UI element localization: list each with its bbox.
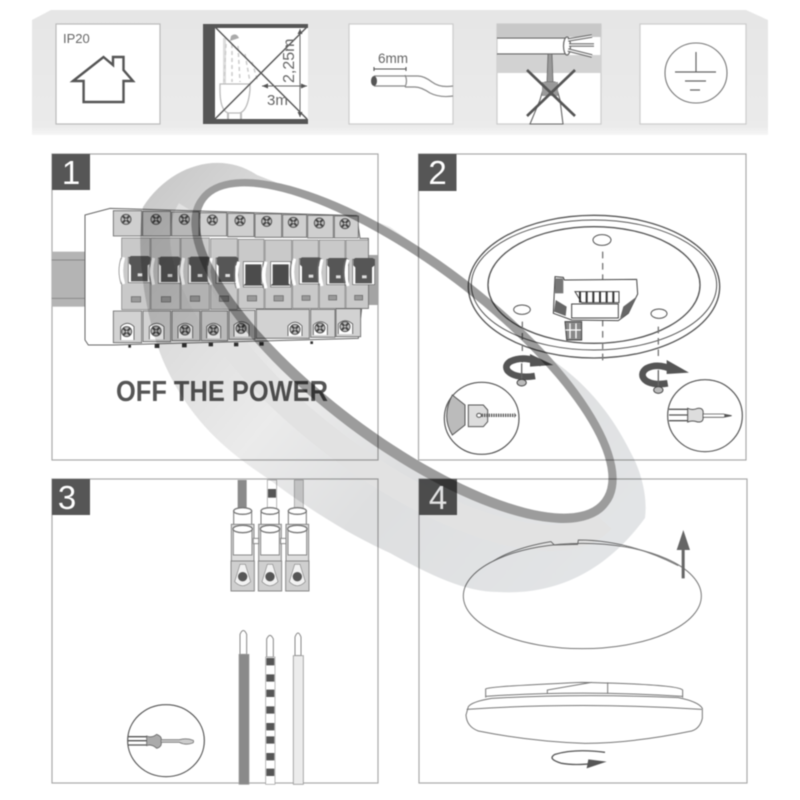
inset: screwdriver xyxy=(128,705,204,777)
panel 2: mount base plate xyxy=(418,154,746,460)
icon: bathroom zone prohibited: 2,25m xyxy=(281,39,298,83)
wire: brown xyxy=(239,630,249,784)
step badge 1: 1 xyxy=(62,154,80,191)
wire: striped earth xyxy=(266,635,275,784)
ghost lamp overlay xyxy=(140,163,646,592)
step badge 3 xyxy=(52,479,90,516)
arrow up xyxy=(677,530,690,578)
step badge 3: 3 xyxy=(58,479,76,516)
icon: bathroom zone prohibited: 3m xyxy=(267,92,288,109)
lamp diagrams xyxy=(463,530,702,768)
caption: off the power: OFF THE POWER xyxy=(116,376,328,408)
step badge 4 xyxy=(419,479,457,516)
icon: earth ground xyxy=(640,24,746,124)
step badge 4: 4 xyxy=(429,479,447,516)
base plate diagram xyxy=(444,215,742,454)
circuit breaker xyxy=(52,208,378,348)
step badge 1 xyxy=(52,154,90,191)
dome cover xyxy=(463,540,701,649)
inset: screwdriver xyxy=(668,380,742,452)
icon: IP20 indoor house: IP20 xyxy=(63,31,90,46)
step badge 2 xyxy=(418,154,456,191)
rotation arrow xyxy=(552,751,607,768)
icon: bathroom zone prohibited xyxy=(203,24,308,124)
driver box xyxy=(553,277,638,340)
top symbols band xyxy=(32,10,768,135)
screw rotation arrows xyxy=(506,354,689,393)
lamp body side view xyxy=(466,682,702,743)
step badge 2: 2 xyxy=(428,154,447,191)
inset: screw and anchor xyxy=(444,382,519,454)
panel 3: connect wires xyxy=(52,479,378,784)
icon: 6mm wire strip xyxy=(349,24,453,124)
icon: 6mm wire strip: 6mm xyxy=(378,51,408,66)
icon: do not drill near cables xyxy=(497,24,601,124)
icon: IP20 indoor house xyxy=(56,24,160,124)
panel 1: off the power xyxy=(52,154,378,460)
terminal block and wires xyxy=(128,480,309,784)
panel 4: fit the cover xyxy=(419,479,747,783)
wire: white neutral xyxy=(293,633,303,784)
